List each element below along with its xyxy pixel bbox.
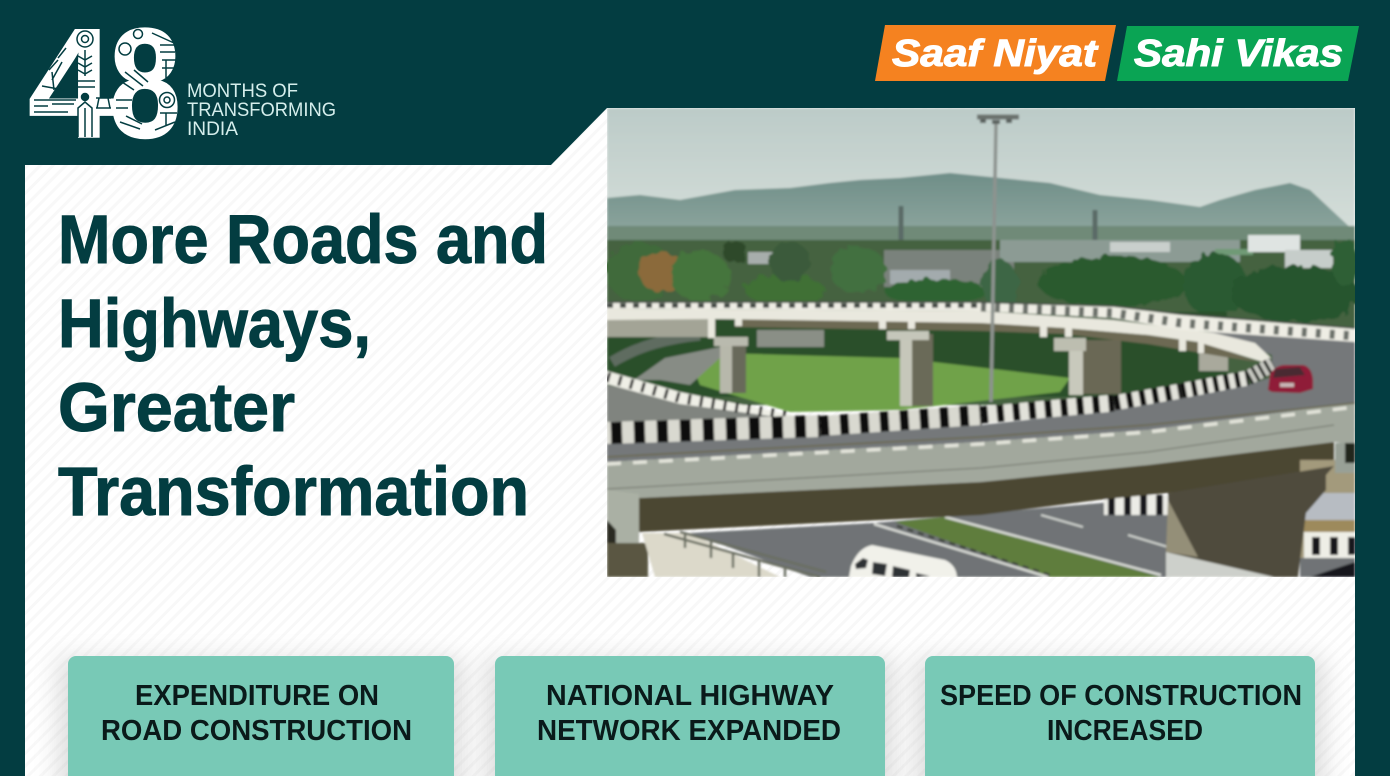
title: Transformation [58,453,529,530]
badge: Saaf Niyat [875,25,1116,81]
card: speed of construction increased: INCREASED [1047,715,1203,747]
logo numeral: 8 [109,0,181,171]
town [748,235,1333,287]
bridge underside [639,442,1334,532]
card: expenditure on road construction: ROAD CONSTRUCTION [101,715,412,747]
photo: flyover [606,108,1359,577]
bridge pier right [1168,466,1334,577]
logo numeral [28,0,181,171]
lower bridge facade [607,403,1355,498]
red car [1268,365,1313,393]
pale structures under flyover [757,330,824,347]
card: national highway network expanded: NATIONAL HIGHWAY [546,680,834,712]
left barrier [607,371,793,419]
trees [606,238,1359,322]
pole [977,117,1019,402]
title: Greater [58,369,295,446]
right background [1298,458,1355,560]
white flyover deck [607,309,1271,363]
title: More Roads and [58,201,548,278]
mountains [607,172,1348,228]
piers [720,340,732,393]
card: national highway network expanded [485,656,895,776]
towers [901,206,1095,240]
distant barrier [1104,495,1168,515]
flyover lower beam [607,318,708,337]
card: national highway network expanded: NETWORK EXPANDED [537,715,841,747]
left pier [607,490,639,543]
lower road [690,497,1168,577]
logo: 48 months of transforming india [28,0,341,171]
logo icon details [34,30,177,137]
upper road [607,322,1355,462]
striped barrier [607,364,1273,433]
embankment [642,533,780,577]
badge: Sahi Vikas [1117,26,1359,81]
upper rail [607,303,1355,342]
badge: Saaf Niyat: Saaf Niyat [892,33,1098,75]
card: speed of construction increased: SPEED OF CONSTRUCTION [940,680,1302,712]
van [849,545,957,577]
guardrail [664,532,826,577]
sky [607,108,1355,238]
card: expenditure on road construction: EXPENDITURE ON [135,680,379,712]
card: speed of construction increased [915,656,1325,776]
card: expenditure on road construction [58,656,464,776]
title [58,201,548,530]
deck arches [708,318,1204,353]
logo numeral: 4 [28,0,114,171]
under-flyover greenery [607,312,1227,397]
median [895,517,1161,577]
logo text: TRANSFORMING [187,100,336,121]
title: Highways, [58,285,371,362]
logo text: MONTHS OF [187,81,298,102]
badge: Sahi Vikas: Sahi Vikas [1134,33,1343,75]
distant tree band [607,224,1355,242]
grass [690,353,1070,412]
logo text: INDIA [187,119,238,140]
far road left [607,384,771,424]
